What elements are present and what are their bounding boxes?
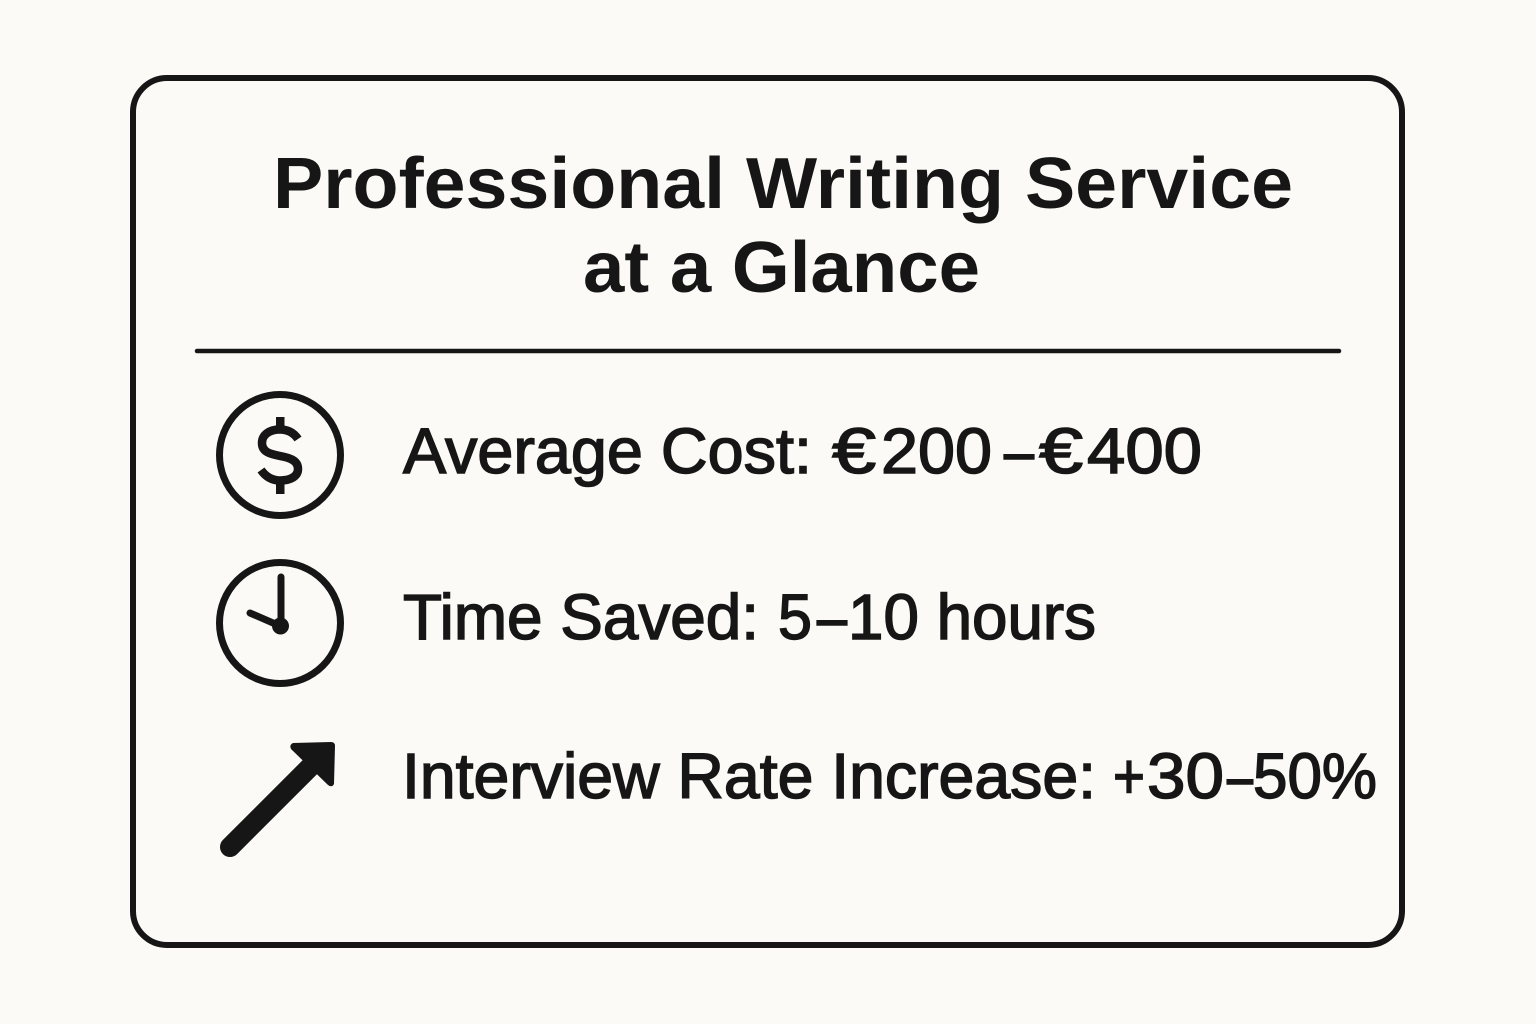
text: time saved: 5 (778, 581, 812, 653)
text: average cost: – (1004, 415, 1034, 487)
text: interview rate: 30 (1147, 740, 1224, 812)
panel: card frame (133, 78, 1402, 945)
icon: dollar coin (220, 394, 340, 516)
text: interview rate: Interview Rate Increase: (402, 740, 1096, 812)
title: at a Glance (583, 228, 980, 308)
text: interview rate: + (1113, 740, 1145, 812)
text: average cost: 400 (1087, 415, 1202, 487)
title: Professional Writing Service (273, 144, 1293, 224)
text: interview rate: 50% (1253, 740, 1377, 812)
icon: rising arrow (230, 742, 335, 847)
title (273, 144, 1293, 308)
icon: clock (220, 562, 340, 684)
text: interview rate: – (1227, 740, 1253, 812)
text: average cost: Average Cost: (403, 415, 812, 487)
text: time saved: 10 hours (848, 581, 1096, 653)
text: average cost: 200 (881, 415, 992, 487)
text: time saved: Time Saved: (403, 581, 759, 653)
text: average cost: € (1039, 415, 1083, 487)
text: time saved: – (817, 581, 847, 653)
text: average cost: € (832, 415, 876, 487)
